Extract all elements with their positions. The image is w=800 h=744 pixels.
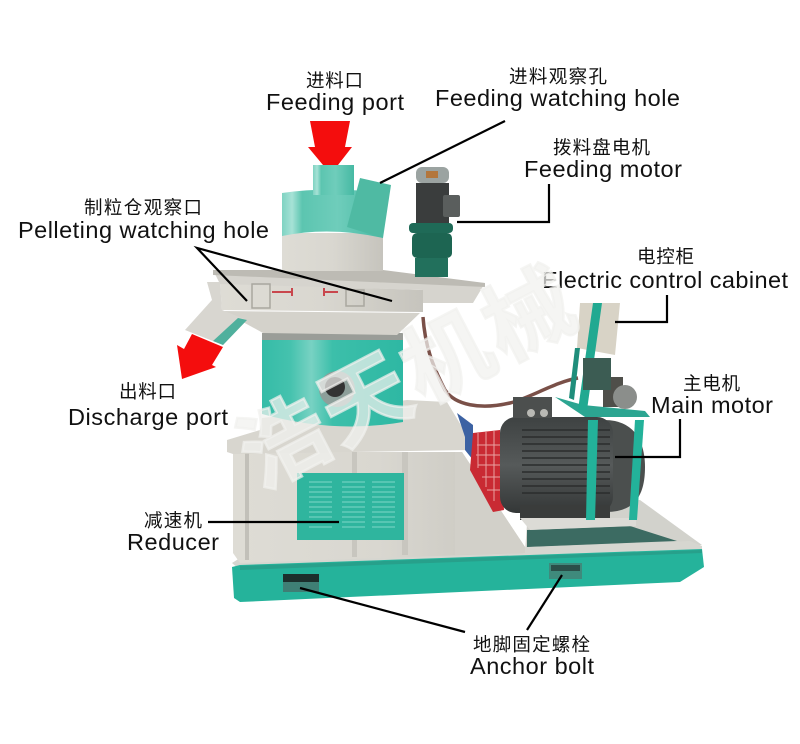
label: feeding motor: Feeding motor bbox=[524, 156, 682, 182]
blue coupling bbox=[457, 413, 473, 460]
label: feeding port bbox=[266, 70, 404, 115]
label: anchor bolt: 地脚固定螺栓 bbox=[473, 634, 590, 655]
label: main motor bbox=[651, 373, 773, 418]
leader: anchor bolt left bbox=[300, 588, 465, 632]
label: discharge port: Discharge port bbox=[68, 404, 228, 430]
label: main motor: 主电机 bbox=[683, 373, 740, 394]
pelleting chamber bbox=[185, 270, 485, 345]
leader: pelleting watching hole bbox=[197, 248, 392, 301]
label: reducer: Reducer bbox=[127, 529, 219, 555]
label: electric control cabinet bbox=[542, 246, 788, 293]
label: feeding watching hole: 进料观察孔 bbox=[509, 66, 607, 87]
small hydraulic motor bbox=[603, 377, 637, 409]
anchor bolt holes bbox=[283, 563, 582, 592]
cable bbox=[423, 317, 578, 406]
label: electric control cabinet: 电控柜 bbox=[637, 246, 694, 267]
leader: electric control cabinet bbox=[615, 295, 667, 322]
label: anchor bolt: Anchor bolt bbox=[470, 653, 594, 679]
feed watching chute bbox=[347, 178, 391, 238]
main motor bbox=[500, 397, 645, 530]
label: pelleting watching hole bbox=[18, 197, 269, 243]
discharge arrow bbox=[177, 334, 223, 379]
machine: pellet mill bbox=[185, 165, 704, 602]
label: discharge port bbox=[68, 381, 228, 430]
leader: main motor bbox=[615, 419, 680, 457]
label: reducer: 减速机 bbox=[144, 510, 202, 531]
motor frame bbox=[555, 377, 650, 520]
hopper bbox=[282, 165, 391, 271]
feeding motor bbox=[409, 167, 460, 277]
label: main motor: Main motor bbox=[651, 392, 773, 418]
reducer top slab bbox=[227, 400, 468, 454]
label: anchor bolt bbox=[470, 634, 594, 679]
label: feeding motor bbox=[524, 137, 682, 182]
label: electric control cabinet: Electric control cabinet bbox=[542, 267, 788, 293]
red fan guard bbox=[470, 430, 504, 512]
inspection clamps bbox=[252, 284, 364, 308]
reducer vent panel bbox=[297, 473, 404, 540]
label: feeding port: Feeding port bbox=[266, 89, 404, 115]
label: feeding watching hole: Feeding watching hole bbox=[435, 85, 680, 111]
discharge chute bbox=[185, 282, 247, 345]
electric control cabinet bbox=[569, 303, 620, 410]
leader: reducer bbox=[208, 521, 339, 523]
label: feeding port: 进料口 bbox=[306, 70, 363, 91]
label: feeding watching hole bbox=[435, 66, 680, 111]
label: feeding motor: 拨料盘电机 bbox=[553, 137, 650, 158]
label: reducer bbox=[127, 510, 219, 555]
lower teal drum bbox=[262, 333, 403, 426]
label: pelleting watching hole: Pelleting watching hole bbox=[18, 217, 269, 243]
leader: feeding motor bbox=[457, 184, 549, 222]
label: pelleting watching hole: 制粒仓观察口 bbox=[84, 197, 202, 218]
leader: feeding watching hole bbox=[380, 121, 505, 183]
watermark: 浩天机械 bbox=[222, 251, 591, 507]
leader: anchor bolt right bbox=[527, 575, 562, 630]
skid base bbox=[232, 500, 704, 602]
label: discharge port: 出料口 bbox=[119, 381, 176, 402]
reducer housing bbox=[227, 400, 525, 563]
feeding arrow bbox=[308, 121, 352, 165]
